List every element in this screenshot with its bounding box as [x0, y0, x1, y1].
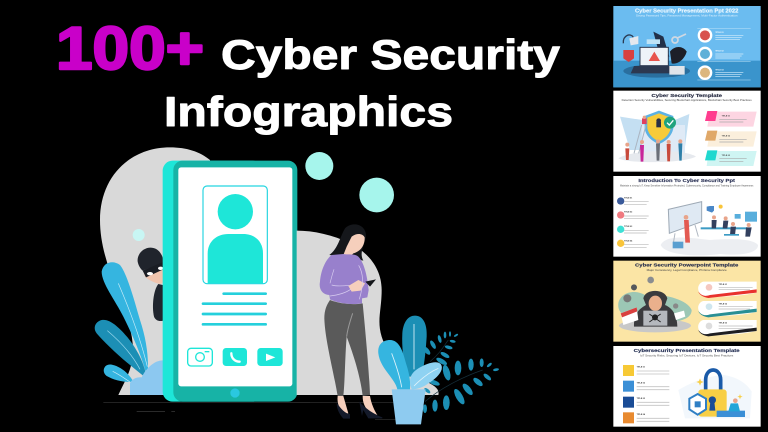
- topic list: TITLE 02: [624, 212, 633, 214]
- subtitle: Strong Password Tips, Password Management, Multi-Factor Authentication: [636, 14, 738, 18]
- heading: Cyber Security Powerpoint Template: [635, 263, 739, 269]
- icon: call: [223, 348, 247, 366]
- thief: [138, 248, 175, 321]
- topic list: TITLE 03: [624, 226, 633, 228]
- thumbnail: cybersecurity presentation template: [613, 346, 761, 427]
- title: 100+: [56, 15, 204, 82]
- bubble one: [305, 152, 333, 180]
- phone: [163, 161, 297, 402]
- topic list: TITLE 04: [624, 239, 633, 242]
- icon: camera: [188, 348, 212, 366]
- cards: [698, 282, 757, 336]
- cards: TITLE 01: [719, 284, 728, 286]
- subtitle: Detection Security Vulnerabilities, Securing Blockchain Applications, Blockchain Security Best Practices: [622, 98, 752, 102]
- ground line: [103, 401, 310, 404]
- classroom scene: [661, 202, 758, 255]
- plant left: [95, 262, 168, 395]
- profile card: [203, 186, 267, 284]
- heading: Cybersecurity Presentation Template: [634, 348, 740, 354]
- title: [56, 15, 561, 135]
- text lines: [203, 294, 266, 324]
- topic list: [617, 197, 649, 247]
- ground line: [290, 402, 397, 419]
- laptop scene: [623, 32, 690, 78]
- cards: TITLE 02: [722, 135, 731, 137]
- shield scene: [618, 111, 696, 162]
- tile list: TITLE 03: [637, 398, 646, 400]
- icon: video: [257, 348, 283, 366]
- cards: [705, 111, 757, 166]
- ground dash: [137, 410, 175, 412]
- tile list: [623, 365, 669, 423]
- heading: Cyber Security Presentation Ppt 2022: [635, 8, 738, 14]
- subtitle: IoT Security Risks, Securing IoT Devices, IoT Security Best Practices: [640, 353, 734, 357]
- subtitle: Maintain a strong IoT, Keep Sensitive Information Protected, Cybersecurity, Compliance and Training Employee Awareness: [620, 183, 754, 187]
- padlock scene: [678, 370, 752, 418]
- cards: TITLE 02: [719, 303, 728, 305]
- illustration: woman and plant: [290, 152, 499, 424]
- illustration: phone and thief: [95, 147, 310, 411]
- subtitle: Major Consistency, Legal Compliance, Phi Ena Compliance: [647, 268, 727, 272]
- thumbnail: cyber security template: [613, 91, 761, 172]
- fern: [422, 331, 499, 413]
- hacker scene: [618, 277, 692, 332]
- feature list: [697, 28, 751, 80]
- feature list: TITLE 02: [715, 51, 724, 53]
- topic list: TITLE 01: [624, 198, 633, 200]
- thumbnail: introduction to cyber security: [613, 176, 761, 257]
- small bubble: [133, 229, 145, 241]
- title: Infographics: [164, 88, 453, 135]
- thumbnail: cyber security presentation: [613, 6, 761, 87]
- heading: Introduction To Cyber Security Ppt: [638, 178, 735, 184]
- tile list: TITLE 04: [637, 413, 646, 416]
- tile list: TITLE 01: [637, 366, 646, 368]
- feature list: TITLE 01: [715, 32, 724, 34]
- tile list: TITLE 02: [637, 382, 646, 384]
- title: Cyber Security: [221, 31, 561, 78]
- cards: TITLE 01: [722, 116, 731, 118]
- cards: TITLE 03: [719, 323, 728, 325]
- potted plant: [378, 316, 442, 424]
- heading: Cyber Security Template: [651, 93, 722, 99]
- feature list: TITLE 03: [715, 69, 724, 71]
- thumbnail: cyber security powerpoint template: [613, 261, 761, 342]
- cards: TITLE 03: [722, 155, 731, 157]
- bubble two: [359, 178, 394, 212]
- woman: [320, 224, 382, 419]
- grey blob left: [100, 147, 223, 395]
- grey blob right: [297, 231, 439, 395]
